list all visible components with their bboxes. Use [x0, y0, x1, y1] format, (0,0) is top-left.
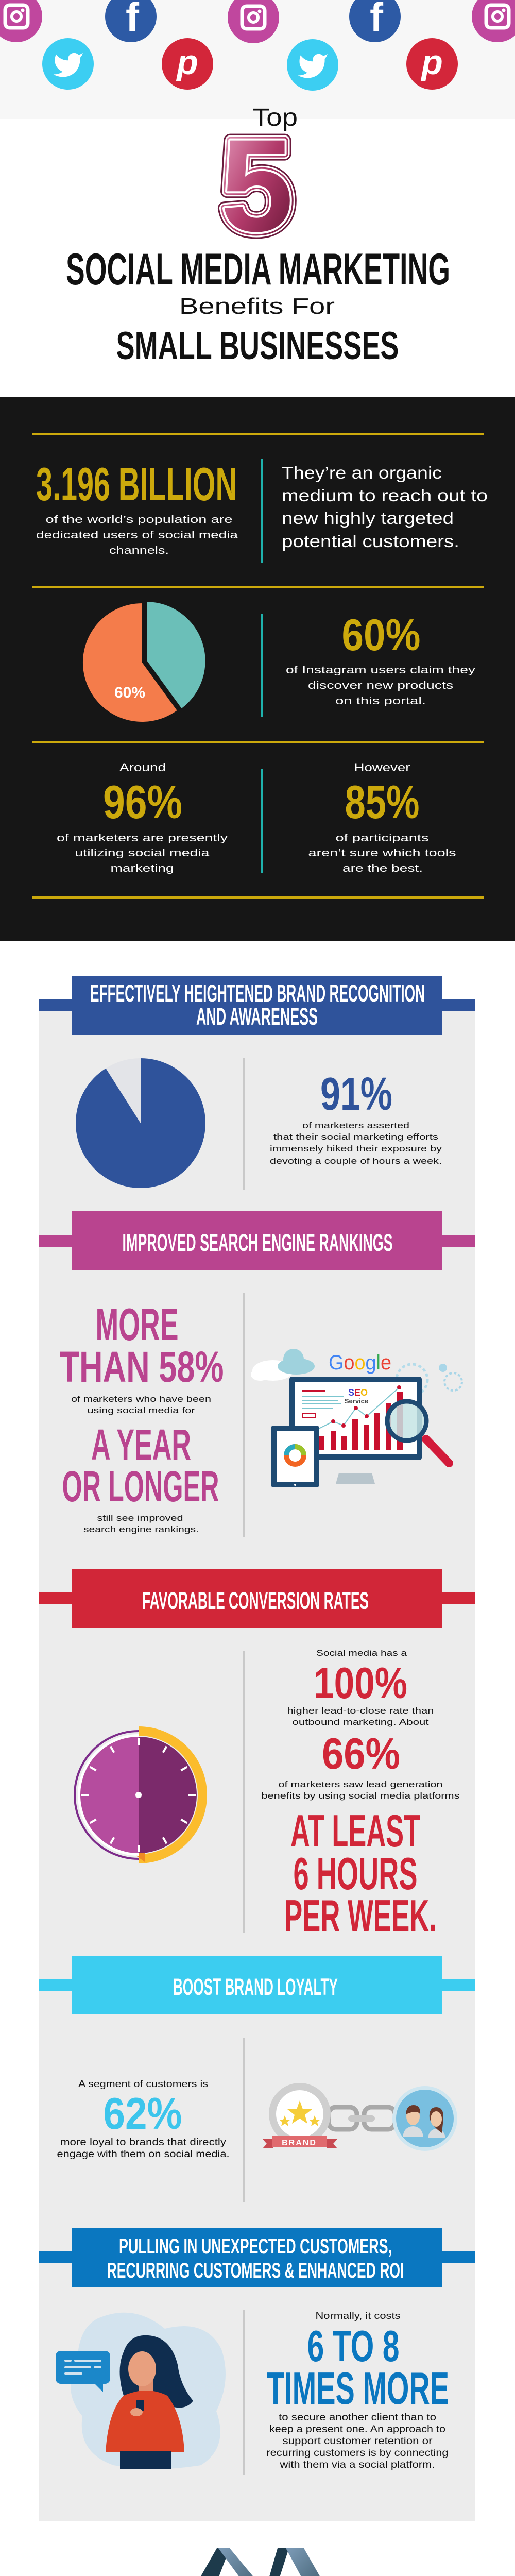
icon: twitter [287, 39, 338, 91]
header: social icons band [0, 0, 515, 119]
stat: 96%: Around [119, 761, 166, 774]
stat: more than 58%: using social media for [88, 1405, 195, 1415]
stat: 60% instagram: on this portal. [335, 696, 426, 707]
title: SMALL BUSINESSES: SMALL BUSINESSES [116, 324, 399, 368]
stat: more than 58%: THAN 58% [60, 1343, 224, 1391]
title: big 5: 5 [220, 112, 294, 259]
chart: pie 60% [83, 602, 205, 722]
illustration: woman with phone [56, 2313, 226, 2469]
stat: 100% / 66% / 6 hours: of marketers saw lead generation [278, 1780, 443, 1789]
stat: 6 to 8 times more: recurring customers is by connecting [267, 2448, 448, 2459]
stat: 96%: marketing [110, 863, 174, 874]
text: organic medium: new highly targeted [282, 509, 454, 528]
stat: more than 58%: of marketers who have been [71, 1394, 211, 1404]
panel: dark stats [0, 397, 515, 941]
stat: more than 58% [60, 1299, 224, 1534]
illustration: SEO monitor: Service [345, 1397, 368, 1405]
illustration: brand chain customers: BRAND [282, 2139, 317, 2147]
icon: instagram [228, 0, 279, 43]
stat: 62%: A segment of customers is [78, 2079, 208, 2089]
stat: 96%: 96% [103, 776, 182, 828]
stat: 91%: of marketers asserted [302, 1121, 409, 1130]
title: Top: Top [252, 104, 298, 131]
icon: pinterest [406, 38, 458, 90]
title: big 5: 5 [220, 112, 294, 259]
stat: 60% instagram: of Instagram users claim they [286, 665, 475, 676]
stat: 3.196 billion [36, 459, 238, 556]
stat: 100% / 66% / 6 hours: 100% [314, 1659, 407, 1708]
illustration: brand chain customers [263, 2086, 457, 2151]
stat: 96%: utilizing social media [75, 848, 210, 859]
stat: 85%: of participants [336, 833, 428, 844]
title: big 5: 5 [220, 112, 294, 259]
icon: pinterest: p [176, 43, 198, 82]
heading: brand recognition [39, 976, 475, 1035]
heading: brand loyalty [39, 1956, 475, 2014]
stat: 6 to 8 times more: 6 TO 8 [307, 2322, 400, 2371]
stat: 96%: of marketers are presently [57, 833, 228, 844]
stat: 100% / 66% / 6 hours: AT LEAST [290, 1805, 420, 1856]
stat: 62%: engage with them on social media. [57, 2149, 230, 2160]
stat: 6 to 8 times more: support customer retention or [282, 2436, 433, 2447]
stat: 100% / 66% / 6 hours: benefits by using social media platforms [262, 1791, 459, 1801]
stat: 3.196 billion: 3.196 BILLION [36, 459, 237, 511]
stat: 85%: aren’t sure which tools [308, 848, 456, 859]
stat: 100% / 66% / 6 hours: 66% [322, 1730, 400, 1778]
stat: 6 to 8 times more: Normally, it costs [315, 2311, 401, 2321]
icon: twitter [42, 38, 94, 90]
icon: instagram [472, 0, 515, 42]
stat: more than 58%: MORE [96, 1299, 178, 1350]
stat: more than 58%: still see improved [97, 1513, 183, 1523]
stat: 85%: 85% [345, 776, 419, 828]
stat: 100% / 66% / 6 hours: 6 HOURS [294, 1848, 417, 1899]
stat: more than 58%: OR LONGER [62, 1462, 219, 1511]
stat: 100% / 66% / 6 hours: higher lead-to-close rate than [287, 1706, 434, 1716]
stat: 85% [308, 761, 456, 874]
illustration: SEO monitor: Google [329, 1351, 391, 1374]
stat: 85%: However [354, 761, 410, 774]
heading: search engine rankings [39, 1211, 475, 1270]
illustration: SEO monitor [251, 1349, 462, 1487]
heading: conversion rates [39, 1569, 475, 1628]
chart: pie 60%: 60% [114, 684, 145, 701]
stat: more than 58%: search engine rankings. [83, 1524, 199, 1534]
stat: 100% / 66% / 6 hours [262, 1648, 459, 1941]
stat: 3.196 billion: dedicated users of social media [36, 530, 238, 541]
heading: brand loyalty: BOOST BRAND LOYALTY [173, 1974, 338, 2000]
heading: brand recognition: AND AWARENESS [196, 1003, 318, 1030]
stat: 60% instagram: 60% [342, 611, 420, 660]
title: big 5: 5 [220, 112, 294, 259]
stat: 91%: that their social marketing efforts [273, 1132, 438, 1142]
stat: 3.196 billion: of the world’s population are [45, 514, 233, 526]
text: organic medium: potential customers. [282, 532, 459, 551]
icon: instagram [0, 0, 42, 42]
icon: pinterest [162, 38, 213, 90]
stat: more than 58%: A YEAR [91, 1420, 191, 1469]
stat: 6 to 8 times more: with them via a social platform. [279, 2460, 435, 2470]
stat: 6 to 8 times more: to secure another client than to [279, 2412, 436, 2423]
stat: 100% / 66% / 6 hours: Social media has a [316, 1648, 407, 1658]
logo: max effect [186, 2548, 336, 2576]
stat: 62%: more loyal to brands that directly [60, 2137, 227, 2148]
icon: facebook [105, 0, 157, 42]
heading: unexpected customers ROI [39, 2228, 475, 2287]
title: big 5: 5 [220, 112, 294, 259]
stat: 91% [270, 1069, 442, 1166]
icon: pinterest: p [420, 43, 443, 82]
text: organic medium: They’re an organic [282, 463, 442, 482]
stat: 6 to 8 times more: keep a present one. An approach to [269, 2424, 445, 2435]
title block [66, 104, 450, 368]
stat: 62%: 62% [103, 2089, 182, 2139]
text: organic medium: medium to reach out to [282, 486, 488, 505]
title: Benefits For: Benefits For [179, 294, 335, 319]
stat: 62% [57, 2079, 230, 2160]
stat: 6 to 8 times more [267, 2311, 449, 2470]
icon: facebook [349, 0, 401, 42]
stat: 91%: 91% [320, 1069, 392, 1120]
stat: 60% instagram: discover new products [308, 680, 453, 691]
stat: 91%: devoting a couple of hours a week. [270, 1156, 442, 1166]
icon: clock [75, 1731, 202, 1862]
stat: 96% [57, 761, 228, 874]
stat: 91%: immensely hiked their exposure by [270, 1144, 442, 1154]
stat: 60% instagram [286, 611, 475, 707]
panel: benefits background [39, 999, 475, 2521]
illustration: SEO monitor: SEO [348, 1387, 368, 1398]
stat: 100% / 66% / 6 hours: outbound marketing. About [293, 1717, 429, 1727]
text: organic medium [282, 463, 488, 551]
stat: 3.196 billion: channels. [109, 545, 169, 556]
chart: pie 91% [76, 1058, 205, 1188]
stat: 85%: are the best. [342, 863, 423, 874]
